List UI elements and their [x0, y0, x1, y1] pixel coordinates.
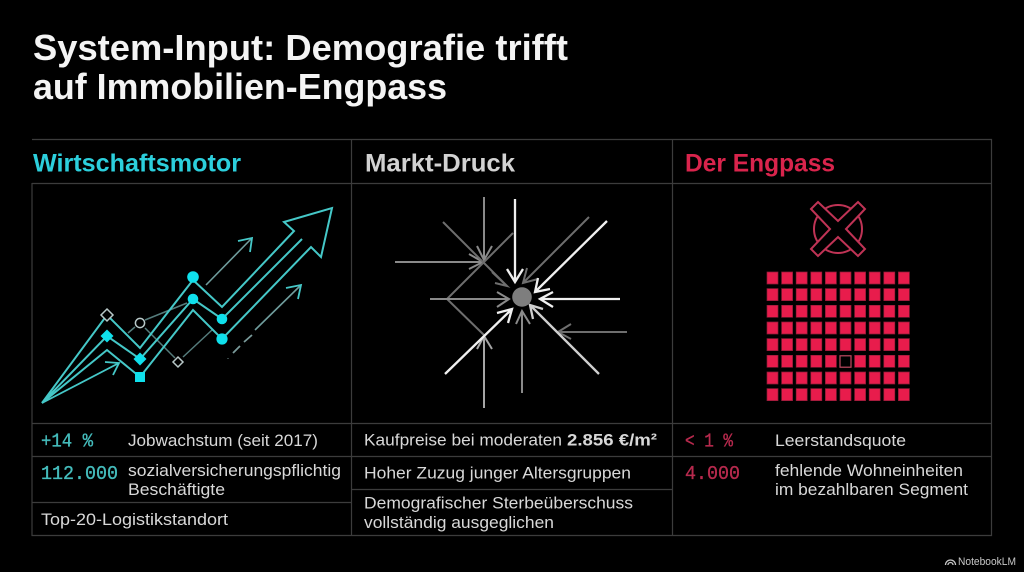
stat: employees	[41, 462, 341, 499]
text: purchase prices	[364, 432, 658, 450]
stat: missing housing units: 4.000	[685, 463, 740, 485]
stat: job growth: Jobwachstum (seit 2017)	[128, 432, 318, 450]
stat: job growth	[41, 430, 318, 452]
stat: vacancy rate: < 1 %	[685, 430, 733, 452]
stat: vacancy rate	[685, 430, 906, 452]
icon: crossed-out circle	[811, 202, 865, 256]
chart: rising growth arrow	[42, 208, 332, 403]
stat: vacancy rate: Leerstandsquote	[775, 432, 906, 450]
stat: missing housing units: im bezahlbaren Segment	[775, 481, 968, 499]
title: System-Input: Demografie trifft	[33, 27, 568, 68]
title: auf Immobilien-Engpass	[33, 66, 447, 107]
diagram: converging pressure arrows	[395, 197, 627, 408]
stat: employees: 112.000	[41, 463, 118, 485]
heading: Wirtschaftsmotor: Wirtschaftsmotor	[33, 150, 241, 178]
text: purchase prices: Kaufpreise bei moderaten	[364, 432, 562, 450]
stat: employees: Beschäftigte	[128, 481, 225, 499]
panel: Wirtschaftsmotor	[33, 150, 341, 529]
stat: job growth: +14 %	[41, 430, 94, 452]
title	[33, 27, 568, 107]
central pressure point	[512, 287, 532, 307]
logo: NotebookLM: NotebookLM	[958, 556, 1016, 568]
text: demographic balance	[364, 494, 633, 532]
stat: missing housing units: fehlende Wohneinheiten	[775, 462, 963, 480]
text: purchase prices: 2.856 €/m²	[567, 432, 658, 450]
heading: Markt-Druck: Markt-Druck	[365, 150, 515, 178]
heading: Der Engpass: Der Engpass	[685, 150, 835, 178]
text: young migration: Hoher Zuzug junger Altersgruppen	[364, 464, 631, 482]
text: demographic balance: vollständig ausgeglichen	[364, 514, 554, 532]
chart: housing unit grid with one vacant unit	[767, 272, 909, 401]
stat: missing housing units	[685, 462, 968, 499]
arrow: main trend	[42, 208, 332, 403]
panel: Der Engpass	[685, 150, 968, 499]
stat: employees: sozialversicherungspflichtig	[128, 462, 341, 480]
panel: Markt-Druck	[364, 150, 658, 532]
text: logistics location: Top-20-Logistikstandort	[41, 511, 228, 529]
text: demographic balance: Demografischer Sterbeüberschuss	[364, 494, 633, 512]
